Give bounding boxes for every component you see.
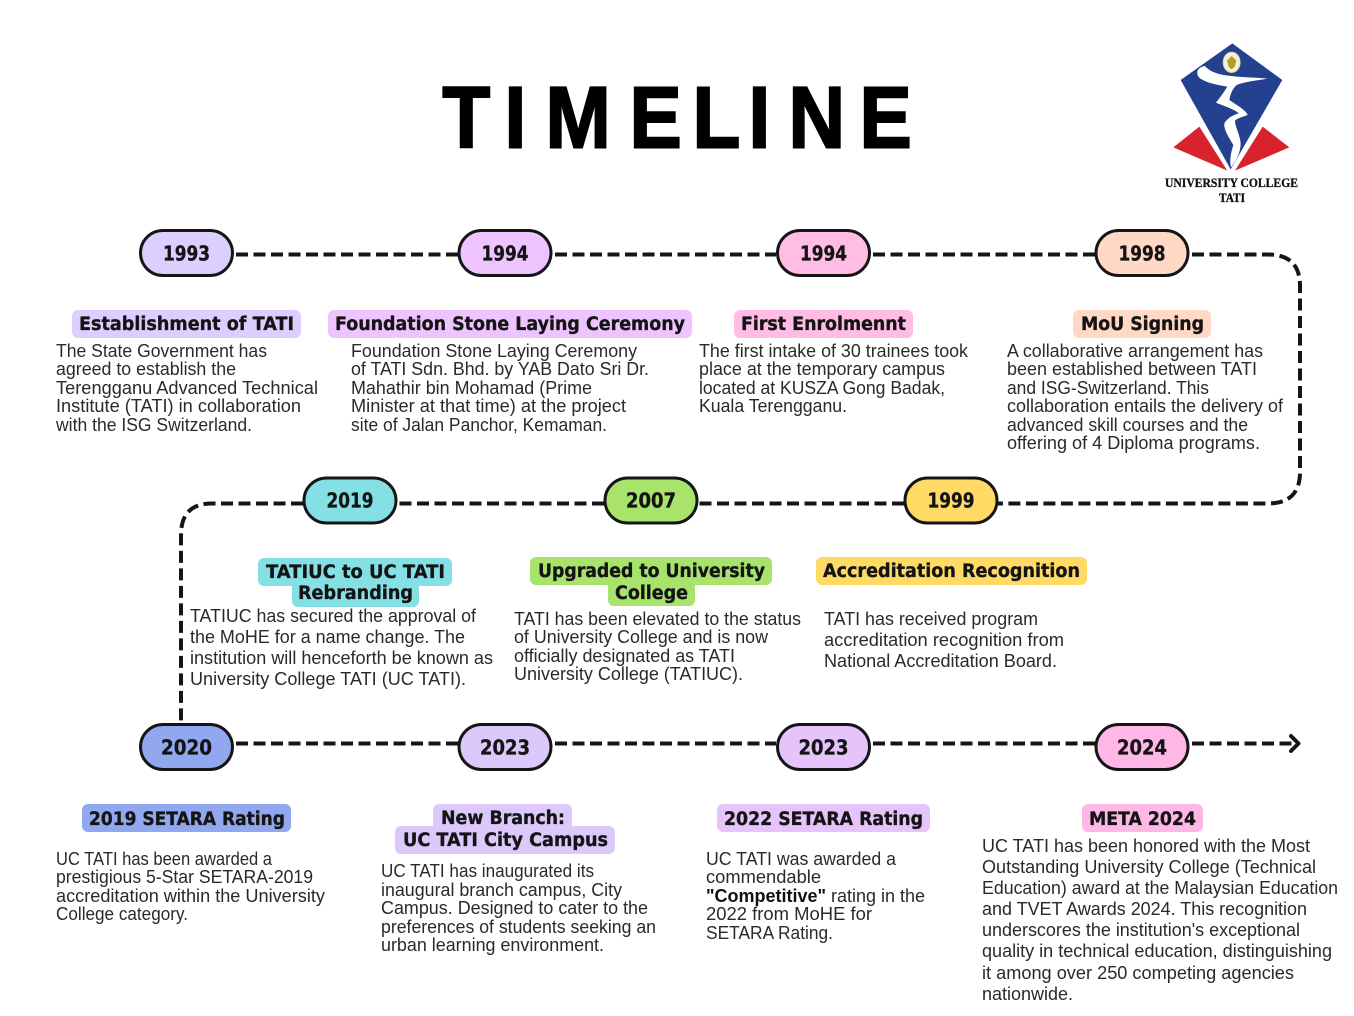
description: UC TATI has been awarded a bbox=[56, 849, 273, 869]
year pill bbox=[905, 478, 997, 523]
description bbox=[706, 849, 925, 943]
milestone: 1999 bbox=[816, 478, 1087, 671]
heading: First Enrolmennt bbox=[741, 314, 906, 335]
description bbox=[699, 341, 969, 416]
heading: Upgraded to University bbox=[538, 561, 765, 582]
heading: 2022 SETARA Rating bbox=[724, 809, 923, 830]
year pill bbox=[778, 230, 870, 276]
heading: MoU Signing bbox=[1081, 314, 1204, 335]
description bbox=[56, 849, 325, 924]
year pill: 2020 bbox=[161, 736, 212, 760]
description: University College (TATIUC). bbox=[514, 664, 743, 684]
milestone: 2020 bbox=[56, 724, 325, 924]
description: "Competitive" rating in the bbox=[706, 886, 925, 906]
year pill: 2007 bbox=[626, 488, 676, 512]
heading bbox=[258, 558, 452, 607]
heading bbox=[530, 557, 772, 606]
description: SETARA Rating. bbox=[706, 923, 833, 943]
description bbox=[1007, 341, 1284, 453]
year pill: 1994 bbox=[482, 242, 528, 266]
year pill bbox=[1096, 230, 1188, 276]
heading bbox=[395, 804, 615, 854]
heading: Establishment of TATI bbox=[79, 314, 294, 335]
year pill: 1999 bbox=[928, 488, 974, 512]
heading: College bbox=[615, 583, 688, 604]
year pill: 2019 bbox=[326, 488, 374, 512]
description: A collaborative arrangement has bbox=[1007, 341, 1263, 361]
description: advanced skill courses and the bbox=[1007, 415, 1248, 435]
description: officially designated as TATI bbox=[514, 646, 735, 666]
description: accreditation recognition from bbox=[824, 630, 1064, 650]
description: The State Government has bbox=[56, 341, 267, 361]
description: UC TATI has inaugurated its bbox=[381, 861, 594, 881]
dashed timeline arrow bbox=[236, 736, 1298, 751]
description: with the ISG Switzerland. bbox=[55, 415, 252, 435]
heading: UC TATI City Campus bbox=[403, 830, 608, 851]
description: offering of 4 Diploma programs. bbox=[1007, 433, 1260, 453]
description: institution will henceforth be known as bbox=[190, 648, 493, 668]
description: underscores the institution's exceptional bbox=[982, 920, 1300, 940]
icon: university college logo: TATI bbox=[1219, 191, 1245, 205]
description bbox=[982, 836, 1338, 1004]
description bbox=[55, 341, 318, 435]
milestone: 2019 bbox=[190, 478, 493, 689]
year pill bbox=[140, 724, 232, 770]
description: University College TATI (UC TATI). bbox=[190, 669, 466, 689]
milestone: 1998 bbox=[1007, 230, 1284, 453]
description: and TVET Awards 2024. This recognition bbox=[982, 899, 1307, 919]
description: TATI has been elevated to the status bbox=[514, 609, 801, 629]
description: of TATI Sdn. Bhd. by YAB Dato Sri Dr. bbox=[351, 359, 649, 379]
milestone: 2023 city campus bbox=[381, 724, 656, 955]
description bbox=[381, 861, 656, 955]
heading: META 2024 bbox=[1089, 809, 1196, 830]
year pill: 1998 bbox=[1118, 242, 1166, 266]
description: UC TATI was awarded a bbox=[706, 849, 897, 869]
milestone: 2023 setara bbox=[706, 724, 930, 943]
year pill bbox=[778, 724, 870, 770]
description: located at KUSZA Gong Badak, bbox=[699, 378, 945, 398]
description: Kuala Terengganu. bbox=[699, 396, 847, 416]
description bbox=[351, 341, 649, 435]
year pill bbox=[459, 724, 551, 770]
description: 2022 from MoHE for bbox=[706, 904, 872, 924]
milestone: 2007 bbox=[514, 478, 801, 684]
heading: Foundation Stone Laying Ceremony bbox=[335, 314, 685, 335]
year pill: 2023 bbox=[480, 736, 530, 760]
title: TIMELINE bbox=[442, 69, 912, 166]
description: collaboration entails the delivery of bbox=[1007, 396, 1284, 416]
year pill bbox=[1096, 724, 1188, 770]
description: TATI has received program bbox=[824, 609, 1038, 629]
description: place at the temporary campus bbox=[699, 359, 945, 379]
description: agreed to establish the bbox=[56, 359, 236, 379]
description: Terengganu Advanced Technical bbox=[56, 378, 318, 398]
year pill bbox=[304, 478, 396, 523]
description: urban learning environment. bbox=[381, 935, 604, 955]
description: nationwide. bbox=[982, 984, 1073, 1004]
year pill bbox=[140, 230, 232, 276]
milestone: 1993 bbox=[55, 230, 318, 435]
description: College category. bbox=[56, 904, 188, 924]
description: commendable bbox=[706, 867, 821, 887]
description: Foundation Stone Laying Ceremony bbox=[351, 341, 637, 361]
heading: Rebranding bbox=[298, 583, 413, 604]
heading: TATIUC to UC TATI bbox=[266, 562, 445, 583]
icon: university college logo: UNIVERSITY COLLEGE bbox=[1165, 176, 1298, 190]
description: Mahathir bin Mohamad (Prime bbox=[351, 378, 592, 398]
description: The first intake of 30 trainees took bbox=[699, 341, 969, 361]
description: National Accreditation Board. bbox=[824, 651, 1057, 671]
year pill: 1994 bbox=[800, 242, 847, 266]
description: site of Jalan Panchor, Kemaman. bbox=[351, 415, 607, 435]
description: the MoHE for a name change. The bbox=[190, 627, 465, 647]
milestone: 1994 foundation bbox=[328, 230, 692, 435]
year pill: 1993 bbox=[163, 242, 210, 266]
description: of University College and is now bbox=[514, 627, 769, 647]
description bbox=[514, 609, 801, 684]
heading: Accreditation Recognition bbox=[823, 561, 1080, 582]
description: Education) award at the Malaysian Education bbox=[982, 878, 1338, 898]
description: inaugural branch campus, City bbox=[381, 880, 622, 900]
description bbox=[190, 606, 493, 689]
milestone: 2024 bbox=[982, 724, 1338, 1004]
heading: 2019 SETARA Rating bbox=[89, 809, 285, 830]
description: Outstanding University College (Technical bbox=[982, 857, 1316, 877]
description: quality in technical education, distinguishing bbox=[982, 941, 1332, 961]
year pill bbox=[459, 230, 551, 276]
description: and ISG-Switzerland. This bbox=[1007, 378, 1209, 398]
year pill: 2024 bbox=[1117, 736, 1167, 760]
description: TATIUC has secured the approval of bbox=[190, 606, 477, 626]
description: Minister at that time) at the project bbox=[351, 396, 626, 416]
description bbox=[824, 609, 1064, 671]
year pill bbox=[605, 478, 697, 523]
description: accreditation within the University bbox=[56, 886, 325, 906]
description: been established between TATI bbox=[1007, 359, 1257, 379]
description: prestigious 5-Star SETARA-2019 bbox=[56, 867, 313, 887]
description: Institute (TATI) in collaboration bbox=[56, 396, 301, 416]
icon: university college logo bbox=[1165, 43, 1298, 205]
description: it among over 250 competing agencies bbox=[982, 963, 1294, 983]
description: preferences of students seeking an bbox=[381, 917, 656, 937]
dashed timeline path bbox=[181, 254, 1300, 724]
heading: New Branch: bbox=[441, 808, 565, 829]
description: Campus. Designed to cater to the bbox=[381, 898, 648, 918]
heading bbox=[82, 804, 291, 832]
year pill: 2023 bbox=[798, 736, 848, 760]
description: UC TATI has been honored with the Most bbox=[982, 836, 1310, 856]
milestone: 1994 enrolment bbox=[699, 230, 969, 416]
